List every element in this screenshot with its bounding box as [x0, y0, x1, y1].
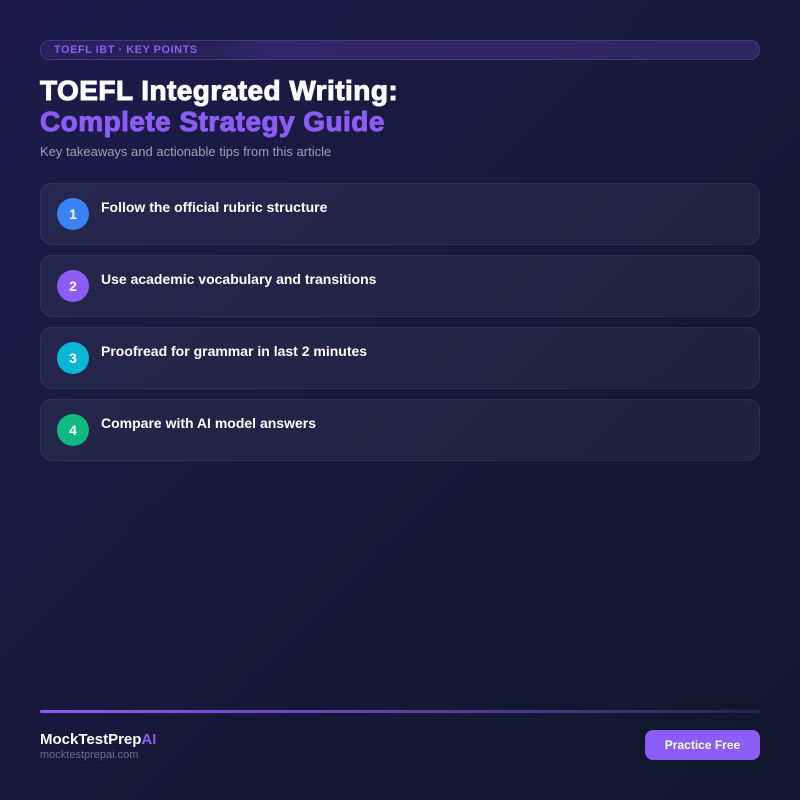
brand name: MockTestPrepAI: [40, 731, 156, 748]
brand url: mocktestprepai.com: [40, 749, 138, 761]
panel: key point 2: [40, 255, 760, 317]
badge: TOEFL iBT key points: [40, 40, 760, 60]
icon: number 2: [57, 270, 89, 302]
icon: number 1: 1: [69, 206, 77, 222]
text: key point 1: Follow the official rubric structure: [101, 199, 327, 215]
text: key point 3: Proofread for grammar in last 2 minutes: [101, 343, 367, 359]
title: [40, 75, 398, 138]
icon: number 2: 2: [69, 278, 77, 294]
text: key point 4: Compare with AI model answers: [101, 415, 316, 431]
button: Practice Free: [645, 730, 760, 760]
icon: number 4: [57, 414, 89, 446]
icon: number 4: 4: [69, 422, 77, 438]
footer divider: [40, 710, 760, 713]
badge: TOEFL iBT key points: TOEFL IBT · KEY POINTS: [54, 44, 198, 56]
title: TOEFL Integrated Writing:: [40, 75, 398, 106]
icon: number 1: [57, 198, 89, 230]
panel: key point 3: [40, 327, 760, 389]
subtitle: Key takeaways and actionable tips from this article: [40, 144, 331, 159]
icon: number 3: 3: [69, 350, 77, 366]
button: Practice Free: Practice Free: [665, 738, 740, 752]
text: key point 2: Use academic vocabulary and transitions: [101, 271, 376, 287]
icon: number 3: [57, 342, 89, 374]
brand block: [40, 731, 156, 761]
title: Complete Strategy Guide: [40, 106, 385, 137]
panel: key point 1: [40, 183, 760, 245]
panel: key point 4: [40, 399, 760, 461]
